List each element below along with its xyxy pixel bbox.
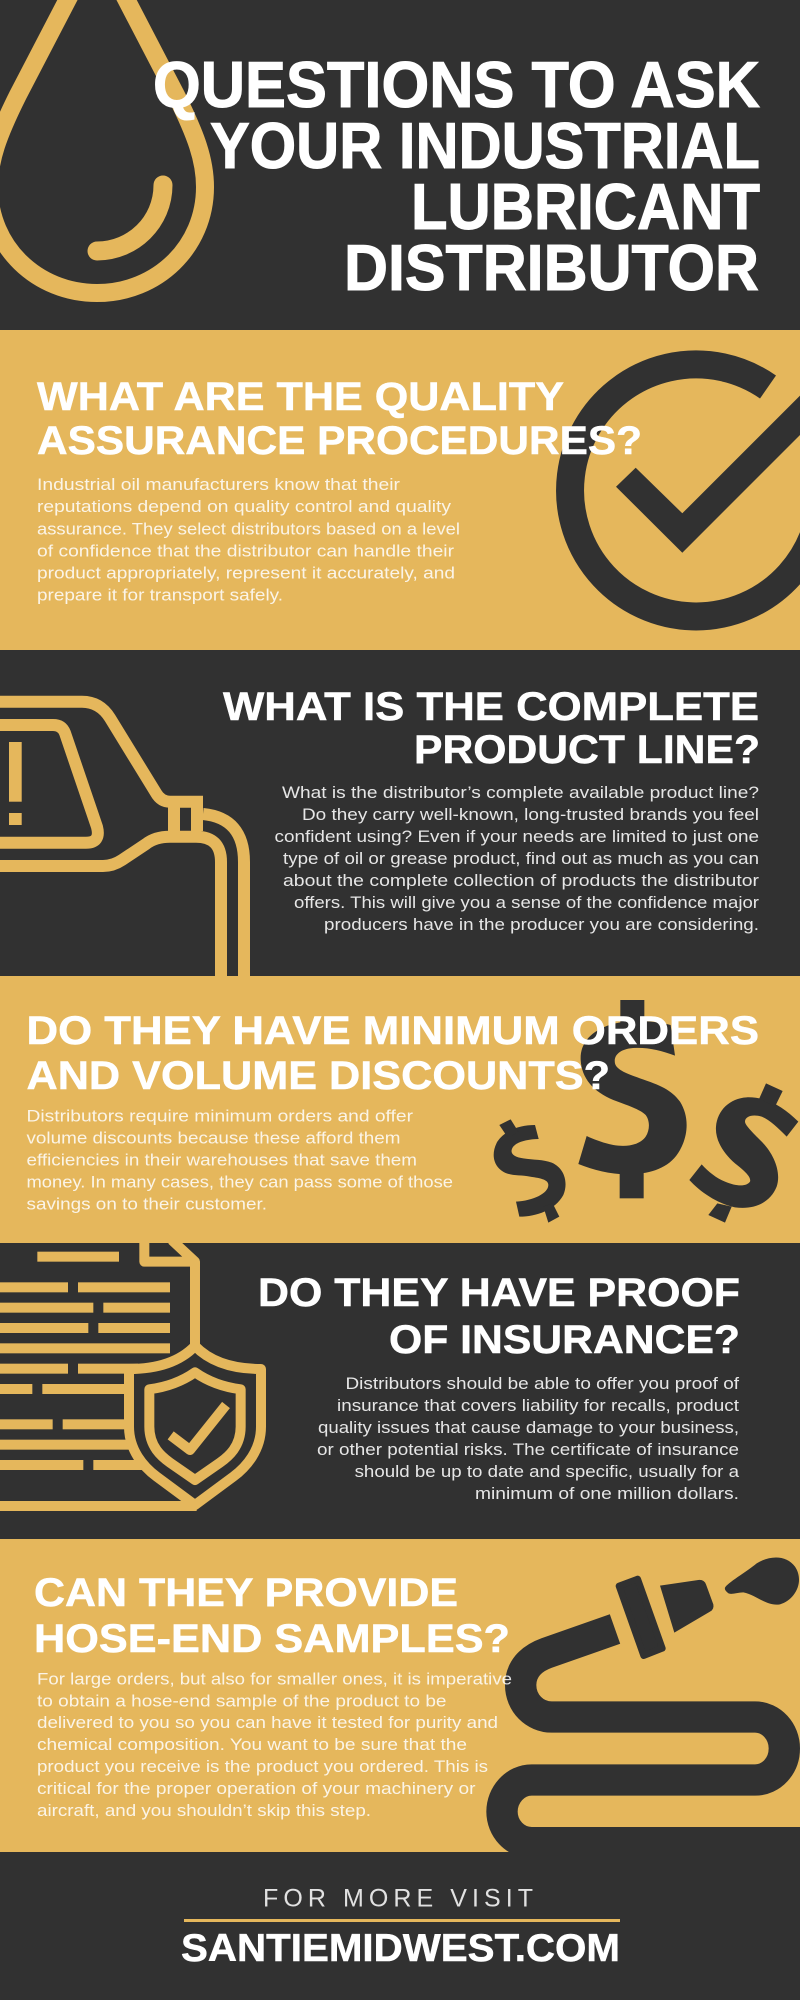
text: product line body: about the complete collection of products the distributor: [283, 872, 760, 890]
heading: minimum orders: AND VOLUME DISCOUNTS?: [26, 1054, 610, 1098]
heading: hose-end samples: HOSE-END SAMPLES?: [34, 1617, 510, 1661]
text: hose-end samples body: to obtain a hose-end sample of the product to be: [37, 1692, 447, 1710]
icon part: shield: [129, 1346, 261, 1505]
panel: minimum orders: [0, 976, 800, 1243]
panel: hose-end samples: [0, 1539, 800, 1852]
heading: hose-end samples: [36, 1578, 508, 1653]
panel: quality assurance: [0, 330, 800, 650]
icon: oil jug: [0, 702, 244, 980]
panel: proof of insurance: [0, 1243, 740, 1511]
text: quality assurance body: prepare it for transport safely.: [37, 586, 283, 604]
text: website: SANTIEMIDWEST.COM: [181, 1927, 620, 1970]
text: quality assurance body: assurance. They select distributors based on a level: [37, 520, 460, 538]
heading: hose-end samples: CAN THEY PROVIDE: [34, 1571, 458, 1615]
text: hose-end samples body: delivered to you so you can have it tested for purity and: [37, 1714, 498, 1732]
icon: check mark in circle: [570, 364, 800, 616]
text: product line body: What is the distributor’s complete available product line?: [282, 784, 759, 802]
text: minimum orders body: volume discounts because these afford them: [26, 1130, 400, 1148]
text: proof of insurance body: Distributors should be able to offer you proof of: [346, 1375, 739, 1393]
heading: minimum orders: [27, 1016, 758, 1090]
title: LUBRICANT: [411, 170, 760, 243]
heading: quality assurance: [36, 382, 640, 455]
text: hose-end samples body: product you receive is the product you ordered. This is: [37, 1758, 488, 1776]
title: [155, 61, 760, 291]
text: quality assurance body: Industrial oil manufacturers know that their: [37, 476, 401, 494]
title: QUESTIONS TO ASK: [153, 48, 760, 121]
text: quality assurance body: product appropriately, represent it accurately, and: [37, 564, 455, 582]
heading: product line: PRODUCT LINE?: [414, 728, 760, 772]
text: product line body: producers have in the producer you are considering.: [324, 916, 759, 934]
text: product line body: Do they carry well-known, long-trusted brands you feel: [302, 806, 759, 824]
icon: hose with nozzle and drop: [502, 1557, 800, 1843]
text: minimum orders body: money. In many cases, they can pass some of those: [26, 1174, 453, 1192]
heading: proof of insurance: DO THEY HAVE PROOF: [258, 1271, 740, 1315]
title: YOUR INDUSTRIAL: [210, 109, 760, 182]
heading: proof of insurance: [260, 1278, 739, 1354]
heading: minimum orders: DO THEY HAVE MINIMUM ORDERS: [26, 1009, 759, 1053]
text: quality assurance body: of confidence that the distributor can handle their: [37, 542, 455, 560]
text: proof of insurance body: minimum of one million dollars.: [475, 1485, 739, 1503]
icon: dollar signs: [494, 1000, 798, 1223]
heading: product line: [222, 692, 758, 764]
text: hose-end samples body: chemical composition. You want to be sure that the: [37, 1736, 467, 1754]
heading: quality assurance: ASSURANCE PROCEDURES?: [37, 419, 642, 463]
text: product line body: offers. This will give you a sense of the confidence major: [294, 894, 760, 912]
title: DISTRIBUTOR: [344, 231, 759, 304]
text: minimum orders body: efficiencies in their warehouses that save them: [26, 1152, 417, 1170]
text: minimum orders body: [26, 1108, 453, 1214]
text: minimum orders body: Distributors require minimum orders and offer: [26, 1108, 414, 1126]
text: hose-end samples body: aircraft, and you shouldn’t skip this step.: [37, 1802, 371, 1820]
text: quality assurance body: reputations depend on quality control and quality: [37, 498, 452, 516]
heading: proof of insurance: OF INSURANCE?: [389, 1318, 740, 1362]
heading: product line: WHAT IS THE COMPLETE: [223, 685, 759, 729]
text: proof of insurance body: or other potential risks. The certificate of insurance: [317, 1441, 739, 1459]
icon part: document lines: [0, 1252, 197, 1511]
icon: document with shield: [0, 1240, 261, 1511]
text: proof of insurance body: [317, 1375, 740, 1503]
text: minimum orders body: savings on to their customer.: [26, 1196, 267, 1214]
text: product line body: type of oil or grease product, find out as much as you can: [283, 850, 759, 868]
text: proof of insurance body: quality issues that cause damage to your business,: [318, 1419, 739, 1437]
text: proof of insurance body: should be up to date and specific, usually for a: [355, 1463, 740, 1481]
text: hose-end samples body: For large orders, but also for smaller ones, it is imperative: [37, 1670, 512, 1688]
text: hose-end samples body: critical for the proper operation of your machinery or: [37, 1780, 476, 1798]
text: product line body: confident using? Even if your needs are limited to just one: [274, 828, 759, 846]
text: product line body: [274, 784, 760, 934]
text: hose-end samples body: [37, 1670, 512, 1820]
panel: product line: [0, 692, 759, 976]
panel: header: [0, 0, 760, 302]
heading: quality assurance: WHAT ARE THE QUALITY: [37, 375, 564, 419]
text: proof of insurance body: insurance that covers liability for recalls, product: [337, 1397, 739, 1415]
panel: footer: [0, 1852, 800, 2000]
text: for more visit: FOR MORE VISIT: [263, 1884, 533, 1912]
icon: oil drop: [0, 0, 205, 293]
text: quality assurance body: [37, 476, 460, 604]
footer rule: [184, 1919, 620, 1922]
